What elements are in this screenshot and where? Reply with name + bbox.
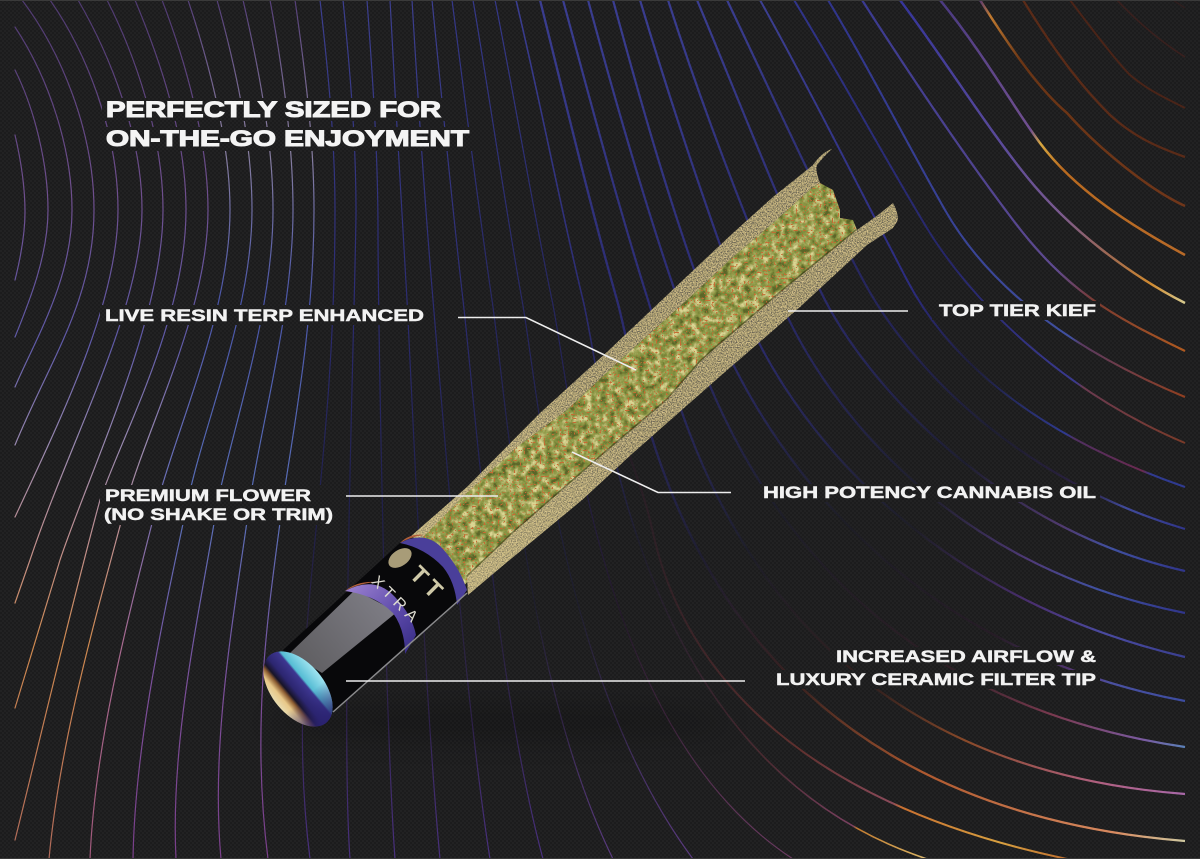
edge rows xyxy=(0,0,1200,1)
background contour lines: right family xyxy=(540,0,1185,841)
brand heart mark xyxy=(385,544,415,572)
callout: live resin terp enhanced xyxy=(105,306,636,370)
callout: live resin terp enhanced: LIVE RESIN TERP ENHANCED xyxy=(105,306,424,325)
callout: high potency cannabis oil xyxy=(572,452,1096,502)
upper purple crescent xyxy=(400,538,467,605)
brand lettering: TT xyxy=(404,561,451,608)
front paper wrap xyxy=(455,195,905,600)
soft shadow under the product xyxy=(270,706,730,738)
filter mouth ellipse xyxy=(250,639,346,739)
filter mouth lower shade xyxy=(250,639,346,739)
flower filling xyxy=(422,183,857,584)
tip highlight xyxy=(290,590,397,673)
callout: top tier kief: TOP TIER KIEF xyxy=(939,301,1096,320)
text knockouts xyxy=(100,98,1100,689)
ceramic filter tip body xyxy=(283,543,467,712)
callout: airflow and ceramic filter tip: INCREASED AIRFLOW & xyxy=(836,647,1096,666)
callout: airflow and ceramic filter tip: LUXURY CERAMIC FILTER TIP xyxy=(776,670,1096,689)
callout: airflow and ceramic filter tip xyxy=(346,647,1096,689)
title: PERFECTLY SIZED FOR xyxy=(106,97,441,122)
brand lettering xyxy=(368,561,451,629)
back paper wrap xyxy=(411,149,832,538)
orange ring accents xyxy=(345,535,424,591)
lower purple crescent xyxy=(345,584,416,654)
title: ON-THE-GO ENJOYMENT xyxy=(106,126,470,151)
product illustration: pre-roll cutaway xyxy=(250,140,905,739)
silver lower edge xyxy=(333,593,467,712)
brand lettering: XTRA xyxy=(368,573,424,629)
callout: high potency cannabis oil: HIGH POTENCY CANNABIS OIL xyxy=(763,483,1096,502)
callout: premium flower: PREMIUM FLOWER xyxy=(105,486,311,505)
title xyxy=(106,97,470,151)
shadow along the inner paper edge xyxy=(467,230,857,577)
callout: premium flower xyxy=(104,486,498,524)
callout: premium flower: (NO SHAKE OR TRIM) xyxy=(104,505,333,524)
